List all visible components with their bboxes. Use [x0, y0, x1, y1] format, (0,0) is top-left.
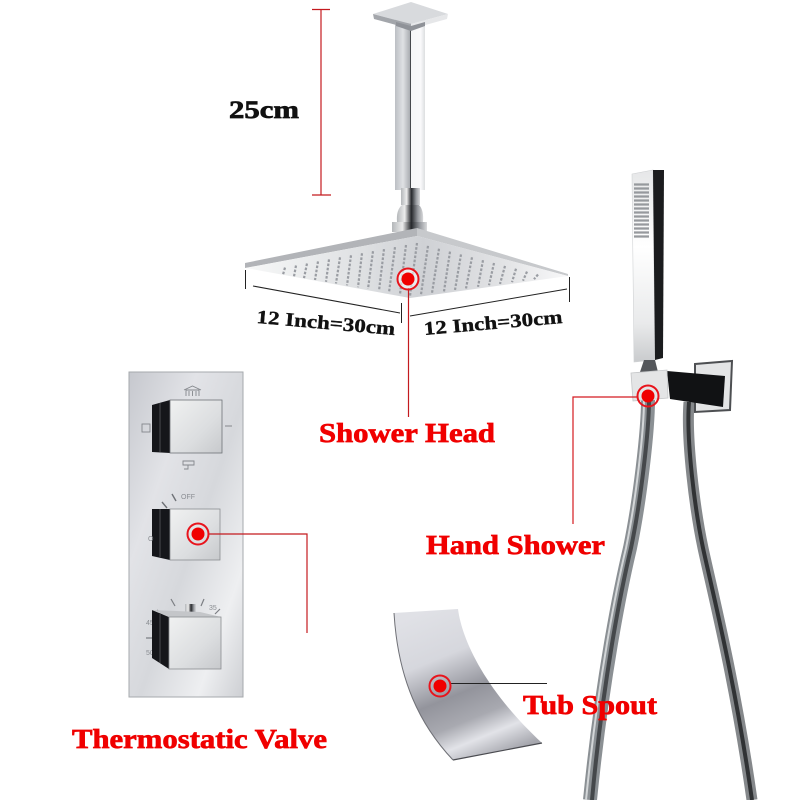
spray grille [634, 184, 649, 236]
off scale: O [148, 536, 154, 543]
hose left [590, 400, 648, 800]
height dimension: 25cm [229, 10, 331, 195]
lower knob [152, 610, 221, 669]
middle knob [152, 509, 220, 560]
diverter icons [142, 386, 232, 469]
ceiling arm pipe [395, 18, 425, 190]
rain head top rim [245, 228, 568, 276]
callout: tub spout: Tub Spout [523, 690, 657, 720]
hand shower [631, 170, 732, 412]
wall plate [695, 361, 732, 412]
width dimension left [246, 270, 402, 340]
callout: shower head [319, 268, 495, 448]
callout: thermostatic valve: Thermostatic Valve [72, 724, 327, 754]
bracket black [667, 371, 725, 407]
temperature stem and scale: 45 [146, 620, 154, 627]
holder chrome [631, 370, 668, 401]
shower head with ceiling arm [245, 2, 568, 298]
callout: thermostatic valve [72, 524, 327, 754]
ceiling flange [373, 2, 448, 31]
off scale: OFF [181, 494, 195, 501]
callout: tub spout [430, 676, 657, 720]
swivel joint [392, 188, 427, 232]
off scale [148, 494, 195, 543]
neck [640, 360, 658, 372]
thermostatic valve plate [129, 372, 243, 697]
hose right [688, 402, 752, 800]
rain head underside [246, 236, 568, 298]
temperature stem and scale [146, 599, 220, 657]
nozzle rows [283, 243, 538, 296]
top knob [152, 400, 222, 453]
width dimension right: 12 Inch=30cm [423, 307, 563, 340]
callout: shower head: Shower Head [319, 418, 495, 448]
callout: hand shower: Hand Shower [426, 530, 605, 560]
temperature stem and scale: 50 [146, 650, 154, 657]
width dimension left: 12 Inch=30cm [256, 307, 396, 340]
temperature stem and scale: 35 [209, 605, 217, 612]
width dimension right [410, 277, 570, 340]
height dimension: 25cm: 25cm [229, 97, 299, 124]
handle [632, 170, 664, 362]
callout: hand shower [426, 386, 658, 560]
tub spout [394, 609, 542, 760]
